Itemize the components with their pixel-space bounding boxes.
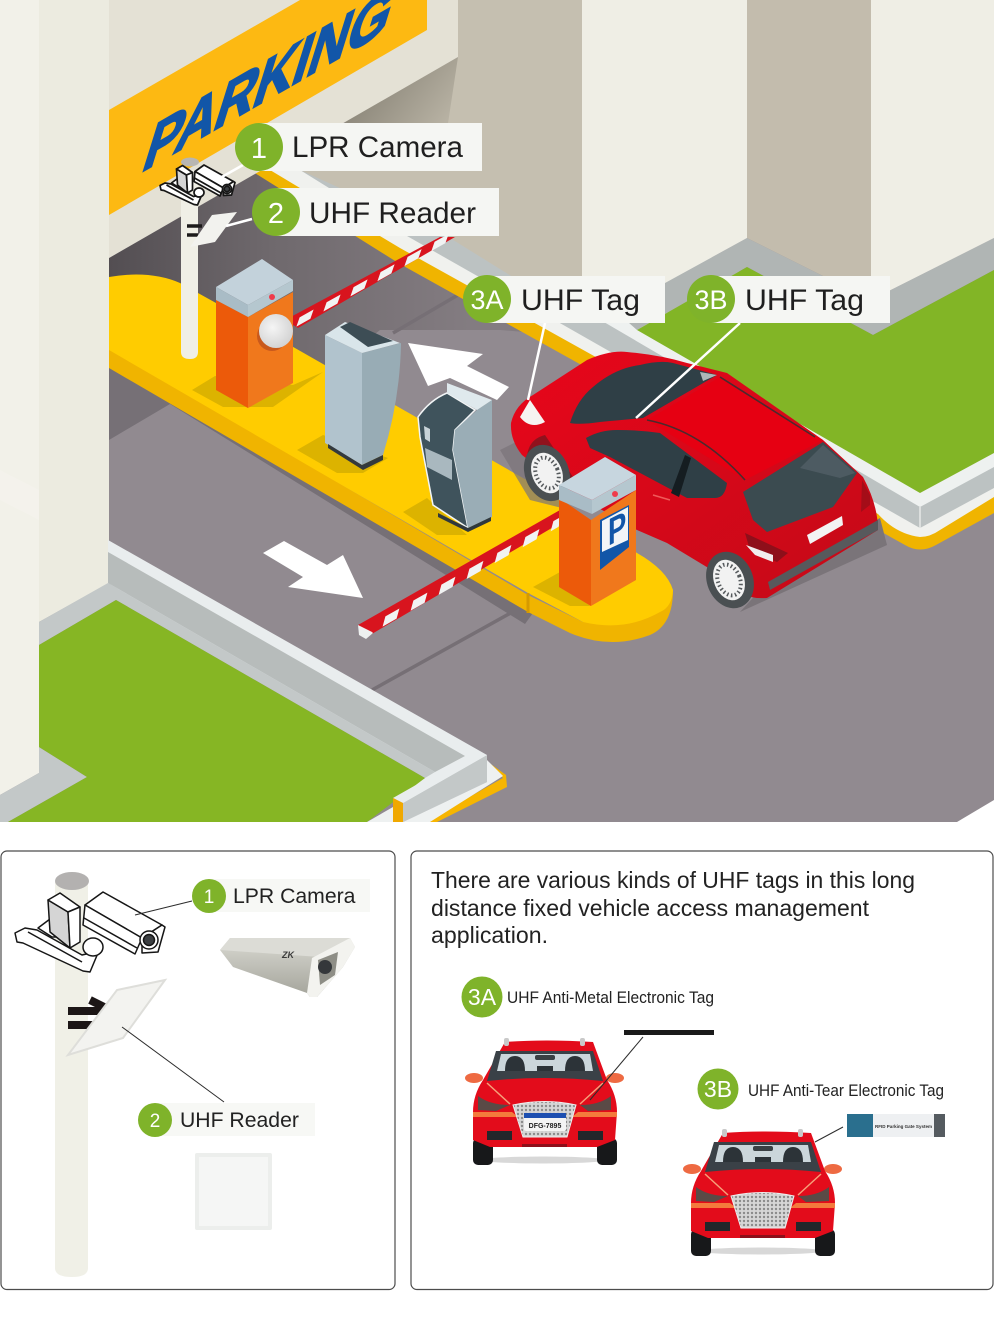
reader on pole — [190, 212, 237, 247]
label 3B UHF Tag: UHF Tag — [745, 284, 864, 317]
road joint line — [372, 292, 525, 690]
label 3B: 3B — [704, 1076, 732, 1102]
label 1 LPR Camera — [235, 123, 482, 171]
label 2 UHF Reader: 2 — [268, 198, 284, 230]
exit barrier gate with P sign — [559, 457, 636, 606]
kerb corner edge — [919, 507, 921, 528]
kerb behind lawn — [620, 238, 994, 335]
building: entrance facade — [109, 0, 458, 258]
corner line bottom right — [957, 800, 994, 822]
intro text: distance fixed vehicle access management — [431, 895, 870, 921]
intro text: There are various kinds of UHF tags in this long — [431, 867, 915, 893]
reader panel — [68, 980, 165, 1055]
leader 3A — [590, 1037, 643, 1100]
panel: camera and reader detail — [1, 851, 395, 1290]
road shadow under island — [109, 367, 535, 624]
tag 3B label: RFID Parking Gate System — [875, 1124, 932, 1130]
leader 3B — [815, 1127, 843, 1142]
label LPR Camera: 1 — [204, 887, 214, 908]
label 3B UHF Tag — [687, 275, 890, 323]
label 1 LPR Camera: LPR Camera — [292, 131, 463, 164]
dark interior wedge — [300, 57, 458, 170]
building: right pillars — [582, 0, 994, 300]
label 2 UHF Reader: UHF Reader — [309, 197, 476, 230]
label 3A UHF Tag: UHF Tag — [521, 284, 640, 317]
label 3A — [462, 976, 714, 1018]
camera on pole — [160, 165, 235, 205]
label UHF Reader — [138, 1103, 315, 1137]
lamp pole — [181, 158, 202, 359]
pay station — [418, 383, 492, 532]
label 3B: UHF Anti-Tear Electronic Tag — [748, 1082, 944, 1100]
machine shadows — [192, 372, 467, 535]
intro text: application. — [431, 922, 548, 948]
leader lines — [220, 165, 740, 418]
exit barrier arm — [358, 510, 562, 639]
yellow island — [109, 275, 673, 642]
label 3A UHF Tag: 3A — [470, 285, 504, 315]
garage interior wall — [300, 0, 582, 320]
tag 3A strip — [624, 1030, 714, 1035]
label 1 LPR Camera: 1 — [251, 133, 267, 165]
camera product photo: ZK — [281, 950, 295, 960]
ticket kiosk — [325, 322, 401, 470]
parking scene illustration — [0, 0, 994, 822]
white arrow: in — [408, 343, 509, 400]
car front 3A — [465, 1038, 624, 1165]
car front 3A: DFG-7895 — [529, 1123, 561, 1130]
leader lines — [122, 901, 224, 1102]
label 3A UHF Tag — [463, 275, 665, 323]
camera product photo — [220, 938, 355, 997]
label LPR Camera — [192, 879, 370, 913]
label 3B — [698, 1068, 944, 1110]
label 3B UHF Tag: 3B — [694, 285, 728, 315]
far kerb — [250, 100, 994, 550]
car front 3B — [683, 1129, 842, 1256]
label 3A: UHF Anti-Metal Electronic Tag — [507, 989, 714, 1007]
label LPR Camera: LPR Camera — [233, 885, 356, 908]
entry barrier gate — [216, 237, 455, 408]
reader arrow marks — [68, 1000, 106, 1025]
exit barrier gate with P sign: P — [608, 504, 626, 555]
upper road — [109, 170, 560, 370]
panel: UHF tags — [411, 851, 993, 1290]
label 3A: 3A — [468, 984, 497, 1010]
reader product photo — [195, 1153, 272, 1230]
label UHF Reader: 2 — [150, 1111, 160, 1132]
pole — [55, 872, 89, 1277]
label UHF Reader: UHF Reader — [180, 1109, 299, 1132]
red car — [500, 352, 887, 616]
lower lawn and kerb — [8, 540, 507, 822]
white arrow: out — [263, 541, 363, 598]
camera line drawing — [15, 892, 165, 972]
tag 3B label — [847, 1114, 945, 1137]
left building — [0, 0, 109, 822]
label 2 UHF Reader — [252, 188, 499, 236]
lawn: upper right — [637, 267, 994, 493]
intro text — [431, 867, 915, 948]
